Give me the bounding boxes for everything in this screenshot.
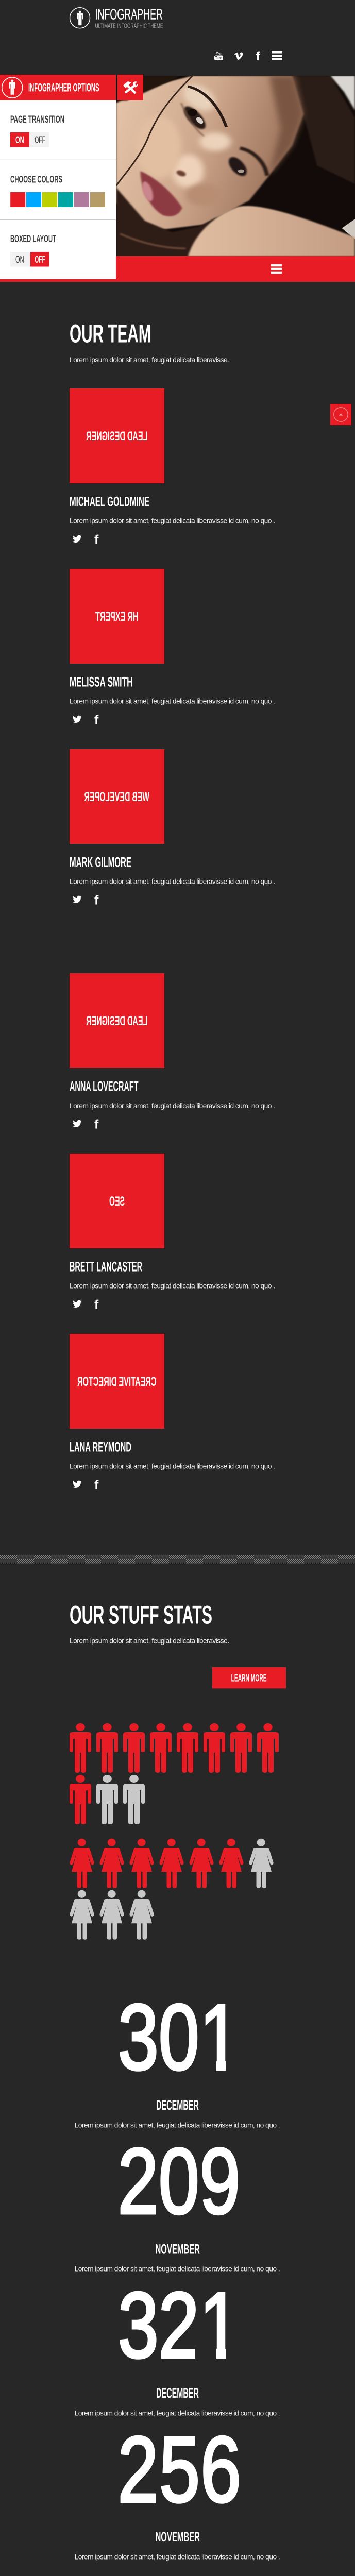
team intro text: Lorem ipsum dolor sit amet, feugiat delicata liberavisse. [70, 356, 229, 364]
learn more button: LEARN MORE [231, 1673, 267, 1684]
team member: brett lancaster: BRETT LANCASTER [70, 1259, 142, 1274]
heading: our stuff stats: OUR STUFF STATS [70, 1600, 212, 1629]
card: hr expert [70, 569, 164, 664]
stats intro text: Lorem ipsum dolor sit amet, feugiat delicata liberavisse. [70, 1637, 229, 1645]
stat: 301 december: 301 [118, 1986, 240, 2089]
red navigation bar [0, 256, 355, 282]
card: lead designer: LEAD DESIGNER [86, 429, 147, 444]
team member: anna lovecraft [70, 973, 275, 1131]
social icons: f [94, 893, 99, 907]
boxed layout setting [10, 234, 56, 267]
stat: 209 november: Lorem ipsum dolor sit amet, feugiat delicata liberavisse id cum, no quo . [75, 2265, 280, 2273]
header logo: INFOGRAPHER [95, 6, 163, 23]
team member: lana reymond: Lorem ipsum dolor sit amet, feugiat delicata liberavisse id cum, no quo . [70, 1463, 275, 1470]
team member: michael goldmine: MICHAEL GOLDMINE [70, 494, 149, 509]
choose colors setting: CHOOSE COLORS [10, 174, 62, 185]
team member: anna lovecraft: ANNA LOVECRAFT [70, 1078, 139, 1094]
boxed layout setting: OFF [35, 255, 45, 265]
card: seo [70, 1154, 164, 1248]
section: header, options panel and team [0, 6, 355, 1492]
team member: mark gilmore [70, 749, 275, 907]
card: creative director: CREATIVE DIRECTOR [77, 1375, 157, 1389]
heading: our team: OUR TEAM [70, 319, 151, 348]
card: lead designer [70, 973, 164, 1068]
options panel body [0, 100, 116, 279]
stat: 321 december: 321 [118, 2274, 240, 2377]
pictogram: men [70, 1723, 279, 1824]
panel: infographer options [0, 75, 143, 279]
social icons: f [94, 1297, 99, 1312]
team member: anna lovecraft: Lorem ipsum dolor sit amet, feugiat delicata liberavisse id cum, no quo . [70, 1102, 275, 1110]
card: lead designer: LEAD DESIGNER [86, 1014, 147, 1028]
stat: 209 november [75, 2130, 280, 2273]
card: seo: SEO [109, 1194, 125, 1209]
card: creative director [70, 1334, 164, 1429]
header social icons and menu [214, 49, 282, 63]
stat: 321 december: Lorem ipsum dolor sit amet, feugiat delicata liberavisse id cum, no quo . [75, 2410, 280, 2417]
page transition setting [10, 114, 64, 147]
social icons: f [94, 1478, 99, 1492]
header logo [70, 6, 163, 29]
social icons [73, 1117, 99, 1131]
icon: vimeo [234, 53, 243, 60]
social icons [73, 532, 99, 547]
team member: mark gilmore: MARK GILMORE [70, 854, 131, 870]
team member: brett lancaster: Lorem ipsum dolor sit amet, feugiat delicata liberavisse id cum, no quo . [70, 1282, 275, 1290]
options panel heading: INFOGRAPHER OPTIONS [28, 81, 99, 94]
section: stuff stats [0, 1555, 355, 2561]
team member: melissa smith: Lorem ipsum dolor sit amet, feugiat delicata liberavisse id cum, no quo . [70, 698, 275, 705]
icon: hamburger menu [272, 51, 282, 60]
team member: lana reymond: LANA REYMOND [70, 1439, 131, 1454]
social icons: f [94, 713, 99, 727]
stat: 321 december: DECEMBER [156, 2385, 199, 2401]
stat: 256 november: 256 [117, 2418, 241, 2521]
scroll to top button [330, 404, 351, 425]
icon: tools button [117, 75, 143, 100]
social icons [73, 1297, 99, 1312]
options panel heading [0, 75, 116, 100]
page transition setting: OFF [35, 135, 45, 146]
social icons [73, 713, 99, 727]
stat: 321 december [75, 2274, 280, 2417]
stat: 301 december [75, 1986, 280, 2129]
team member: mark gilmore: Lorem ipsum dolor sit amet, feugiat delicata liberavisse id cum, no quo . [70, 878, 275, 886]
hero photo: portrait of woman [116, 76, 355, 256]
team member: melissa smith: MELISSA SMITH [70, 674, 133, 689]
stat: 301 december: Lorem ipsum dolor sit amet, feugiat delicata liberavisse id cum, no quo . [75, 2121, 280, 2129]
team member: brett lancaster [70, 1154, 275, 1312]
icon: facebook: f [256, 49, 261, 63]
stat: 209 november: NOVEMBER [156, 2241, 200, 2257]
icon: youtube: You [216, 52, 222, 56]
team member: michael goldmine: Lorem ipsum dolor sit amet, feugiat delicata liberavisse id cum, no quo . [70, 517, 275, 525]
stat: 256 november: Lorem ipsum dolor sit amet, feugiat delicata liberavisse id cum, no quo . [75, 2553, 280, 2561]
icon: youtube [214, 52, 223, 60]
boxed layout setting: ON [15, 255, 24, 265]
icon: hamburger menu [271, 264, 282, 274]
stat: 256 november: NOVEMBER [156, 2529, 200, 2545]
social icons: f [94, 1117, 99, 1131]
card: web developer: WEB DEVELOPER [84, 790, 149, 804]
learn more button [212, 1667, 286, 1688]
pictogram: women [70, 1839, 274, 1940]
card: hr expert: HR EXPERT [95, 609, 138, 624]
choose colors setting [10, 174, 105, 207]
icon: youtube: Tube [215, 56, 222, 60]
social icons: f [94, 532, 99, 547]
social icons [73, 893, 99, 907]
team member: melissa smith [70, 569, 275, 727]
boxed layout setting: BOXED LAYOUT [10, 234, 56, 245]
stat: 209 november: 209 [117, 2130, 240, 2233]
team member: michael goldmine [70, 388, 275, 547]
social icons [73, 1478, 99, 1492]
card: web developer [70, 749, 164, 844]
page transition setting: PAGE TRANSITION [10, 114, 64, 125]
page transition setting: ON [15, 135, 24, 146]
stat: 301 december: DECEMBER [156, 2097, 199, 2113]
team member: lana reymond [70, 1334, 275, 1492]
card: lead designer [70, 388, 164, 483]
stat: 256 november [75, 2418, 280, 2561]
header logo: ULTIMATE INFOGRAPHIC THEME [95, 22, 163, 29]
